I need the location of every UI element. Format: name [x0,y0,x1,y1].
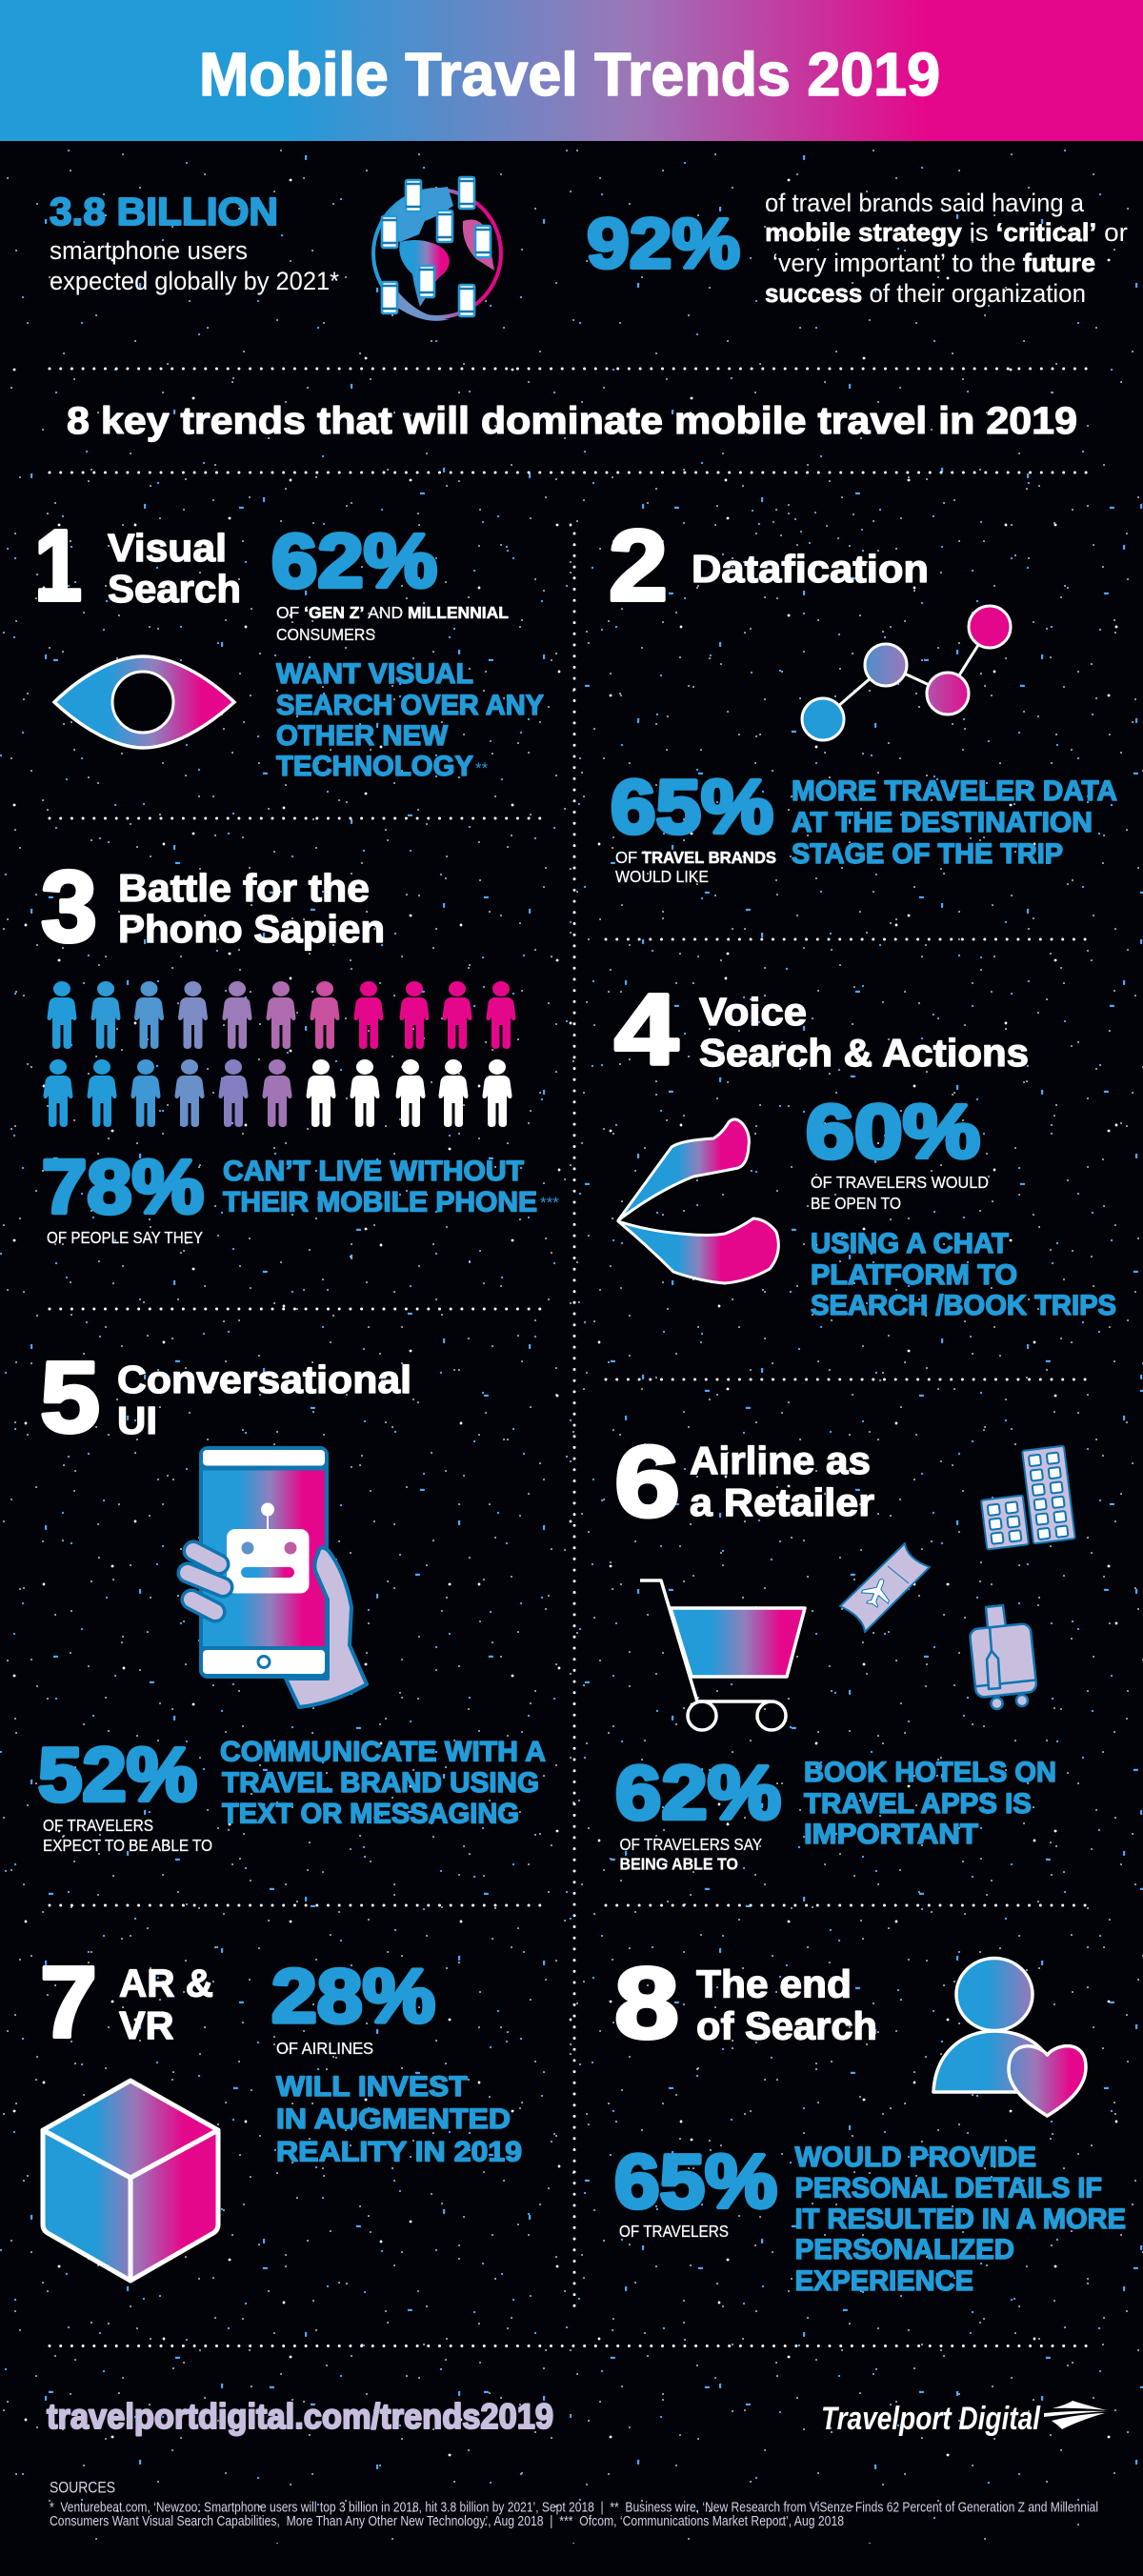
stat caption: EXPECT TO BE ABLE TO [43,1836,212,1855]
stat: 3.8 billion: 3.8 BILLION [50,190,278,233]
statement: MORE TRAVELER DATA [792,775,1117,807]
statement: PLATFORM TO [811,1259,1017,1291]
statement: PERSONALIZED [795,2234,1014,2265]
stat: 92% [587,189,1128,308]
stat caption: BEING ABLE TO [619,1854,738,1873]
stat: 3.8 billion: expected globally by 2021* [50,267,339,295]
pictogram: people [44,981,516,1127]
icon: person with heart [933,1959,1086,2116]
stat caption: OF TRAVELERS WOULD [811,1173,989,1192]
stat: 92%: success of their organization [765,279,1086,308]
icon: cube [43,2081,218,2281]
statement: ** [475,759,489,777]
panel: trend 8 the end of search [614,1947,1126,2297]
panel: trend 3 phono sapien [41,851,559,1247]
heading: UI [117,1399,157,1442]
statement: TRAVEL APPS IS [804,1788,1032,1820]
number 7: 7 [40,1946,97,2059]
statement: COMMUNICATE WITH A [220,1736,546,1768]
statement: OTHER NEW [276,720,449,752]
number 5: 5 [40,1341,100,1454]
heading [108,526,241,611]
heading: Datafication [692,547,929,591]
sources: Consumers Want Visual Search Capabilities, More Than Any Other New Technology’, Aug 2018 | *** Ofcom, ‘Communications Market Report’, Aug 2018 [50,2514,844,2529]
stat caption: BE OPEN TO [811,1194,901,1213]
icon: eye [54,656,234,748]
icon: hotel buildings [981,1446,1075,1549]
stat caption [811,1173,989,1213]
heading: a Retailer [690,1480,874,1524]
header banner [0,0,1143,141]
heading: Search & Actions [699,1031,1029,1075]
statement: AT THE DESTINATION [792,807,1093,838]
stat 65%: 65% [614,2139,777,2224]
stat caption [615,848,776,886]
panel: trend 5 conversational ui [38,1341,546,1855]
statement: SEARCH OVER ANY [276,690,544,721]
stat caption: OF TRAVELERS SAY [619,1835,762,1854]
footer link: travelportdigital.com/trends2019 [47,2397,553,2436]
stat 78%: 78% [42,1144,204,1229]
heading: VR [119,2003,173,2047]
statement [223,1156,559,1218]
number 8: 8 [614,1947,679,2060]
number 6: 6 [614,1425,680,1538]
heading: Phono Sapien [118,907,385,951]
statement [804,1757,1056,1850]
heading [118,866,385,951]
heading: Battle for the [118,866,370,910]
statement: THEIR MOBILE PHONE [223,1187,537,1218]
stat caption: OF TRAVELERS [619,2222,729,2241]
panel: trend 2 datafication [609,510,1117,886]
stat caption: OF TRAVEL BRANDS [615,848,776,867]
statement [792,775,1117,870]
subheading: 8 key trends that will dominate mobile travel in 2019 [67,400,1077,442]
stat: 92%: of travel brands said having a [765,189,1085,217]
heading: The end [696,1962,852,2006]
stat caption: OF TRAVELERS [43,1816,153,1835]
statement: USING A CHAT [811,1228,1009,1259]
heading: Search [108,567,241,611]
statement: SEARCH /BOOK TRIPS [811,1290,1116,1321]
panel: intro stats [50,177,1128,321]
stat caption [276,603,509,644]
stat caption [619,1835,762,1873]
stat: 92%: 92% [587,204,740,283]
stat: 92%: mobile strategy is ‘critical’ or [765,218,1128,247]
stat: 92%: ‘very important’ to the future [772,249,1095,277]
number 1: 1 [34,510,82,622]
statement: IN AUGMENTED [276,2103,511,2135]
stat caption: CONSUMERS [276,625,375,644]
heading: Visual [108,526,227,570]
statement: REALITY IN 2019 [276,2136,522,2168]
sources [50,2479,1098,2529]
title: Mobile Travel Trends 2019 [199,40,940,109]
stat caption: OF AIRLINES [276,2039,373,2058]
number 3: 3 [41,851,97,963]
statement: WANT VISUAL [276,658,473,690]
panel: trend 6 airline as a retailer [614,1425,1075,1873]
panel: trend 7 ar and vr [40,1946,522,2281]
statement: CAN’T LIVE WITHOUT [223,1156,524,1187]
logo: travelport digital: Travelport Digital [821,2401,1041,2437]
statement: WOULD PROVIDE [795,2142,1036,2173]
statement: BOOK HOTELS ON [804,1757,1056,1788]
icon: plane ticket [840,1543,930,1632]
heading: Voice [699,990,807,1034]
heading [699,990,1029,1075]
stat caption: WOULD LIKE [615,867,709,886]
statement [811,1228,1116,1321]
heading: Airline as [690,1439,871,1482]
statement [276,2071,522,2168]
icon: shopping cart [640,1580,805,1730]
statement: TEXT OR MESSAGING [222,1799,519,1829]
statement: EXPERIENCE [795,2265,973,2297]
panel: trend 4 voice search [614,974,1116,1321]
stat: 3.8 billion: smartphone users [50,236,248,265]
heading: AR & [119,1962,213,2005]
stat: 3.8 billion [50,190,339,295]
statement: TRAVEL BRAND USING [222,1767,539,1799]
statement [220,1736,546,1829]
statement: PERSONAL DETAILS IF [795,2173,1102,2204]
stat caption: OF PEOPLE SAY THEY [47,1228,203,1247]
stat 62%: 62% [271,518,437,603]
heading [696,1962,877,2048]
statement: WILL INVEST [276,2071,468,2103]
number 2: 2 [609,510,668,622]
icon: lips [618,1119,778,1283]
stat 62%: 62% [615,1750,781,1835]
stat 28%: 28% [271,1953,435,2039]
statement [276,658,544,782]
statement: *** [540,1194,559,1212]
stat 60%: 60% [806,1089,980,1174]
panel: trend 1 visual search [34,510,544,782]
icon: data nodes [802,606,1011,740]
statement: STAGE OF THE TRIP [792,838,1063,870]
statement: TECHNOLOGY [276,751,473,782]
heading [117,1358,411,1442]
heading [119,1962,213,2047]
stat caption [43,1816,212,1855]
statement [795,2142,1126,2297]
heading: of Search [696,2004,877,2048]
heading: Conversational [117,1358,411,1401]
sources: SOURCES [50,2479,115,2496]
icon: suitcase [970,1605,1037,1709]
number 4: 4 [614,974,678,1086]
icon: hand holding phone with robot [188,1446,367,1707]
heading [690,1439,874,1524]
statement: IMPORTANT [804,1819,978,1850]
statement: IT RESULTED IN A MORE [795,2204,1126,2235]
stat caption: OF ‘GEN Z’ AND MILLENNIAL [276,603,509,622]
stat 52%: 52% [38,1732,197,1817]
icon: globe with phones [373,177,501,321]
stat 65%: 65% [611,764,773,849]
